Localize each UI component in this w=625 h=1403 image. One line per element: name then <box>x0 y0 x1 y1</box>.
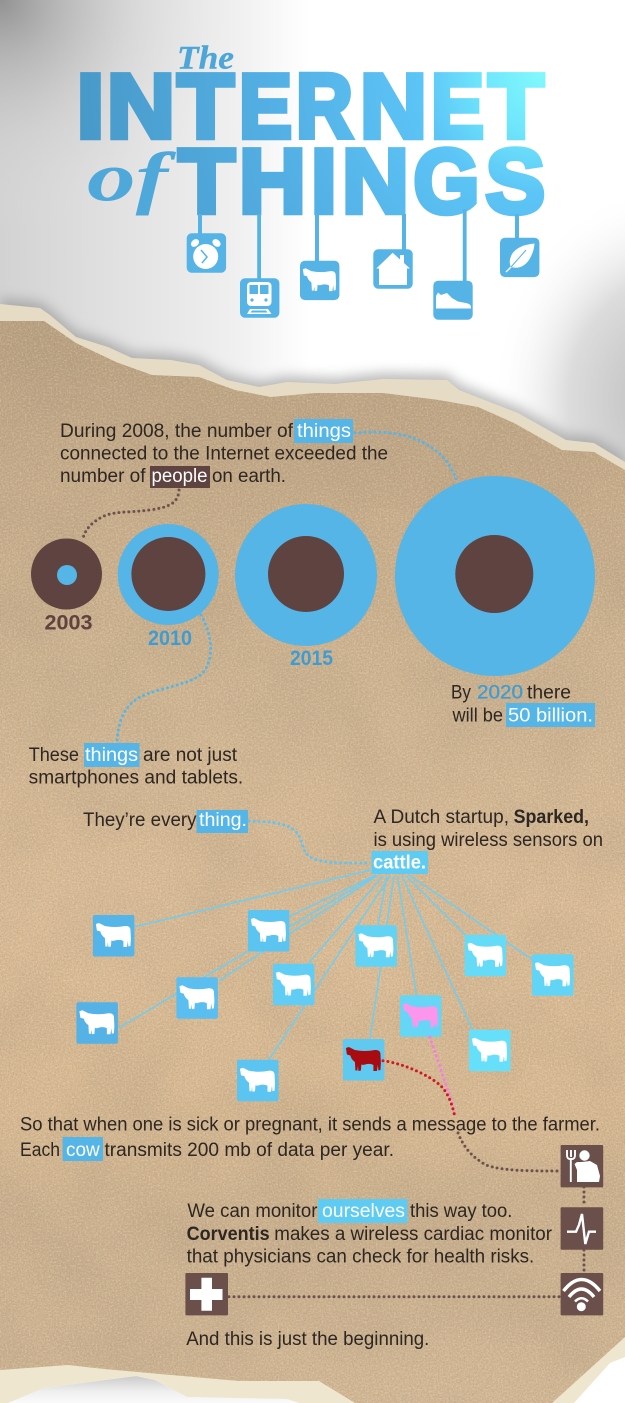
highlight: ourselves: ourselves <box>322 1201 405 1222</box>
title word: of: of <box>87 140 177 217</box>
text: sick or pregnant: So that when one is sick or pregnant, it sends a message to the farmer. <box>20 1114 600 1136</box>
connectors: brown icon chain <box>229 1187 584 1297</box>
circle 2003 <box>31 538 102 634</box>
highlight: cattle: cattle. <box>373 852 426 874</box>
connector: things to 2020 circle <box>355 432 457 482</box>
icon: farmer <box>561 1145 603 1187</box>
highlight: 50 billion: 50 billion. <box>508 706 593 726</box>
icon: cow <box>300 214 339 300</box>
title word: INTERNET: T <box>177 56 234 157</box>
title word: THINGS: G <box>413 131 479 232</box>
text: monitor ourselves: that physicians can check for health risks. <box>187 1246 534 1268</box>
text: closing line: And this is just the beginning. <box>186 1329 429 1350</box>
title word: INTERNET: R <box>296 56 353 157</box>
text: 2020 forecast: there <box>527 682 571 704</box>
title <box>76 40 545 232</box>
title word: The: The <box>177 40 234 76</box>
title word: INTERNET: T <box>488 56 544 157</box>
title word: THINGS: N <box>342 131 409 232</box>
text: not just smartphones: These <box>29 745 79 766</box>
title word: INTERNET: I <box>76 56 104 157</box>
cow 11: sick, red <box>343 1039 384 1080</box>
text: they're everything: They’re every <box>83 810 197 831</box>
cow 4 <box>465 935 506 976</box>
icon: alarm clock <box>187 214 226 273</box>
title word: INTERNET: E <box>239 56 292 157</box>
text: Sparked: Sparked, <box>514 807 589 828</box>
highlight: thing: thing. <box>199 810 247 831</box>
icon: running shoe <box>433 209 473 320</box>
cow 3 <box>355 925 397 967</box>
text: sick or pregnant: Each <box>20 1140 60 1161</box>
title word: THINGS: T <box>178 131 235 232</box>
text: Sparked: A Dutch startup, <box>374 807 509 828</box>
torn paper panel <box>0 298 625 1403</box>
connector: 2010 circle to things <box>117 615 211 742</box>
circle 2010: 2010 <box>148 627 192 650</box>
text: 2008 milestone <box>60 419 388 488</box>
text: not just smartphones <box>29 743 243 788</box>
connector: red cow alert <box>383 1061 454 1115</box>
text: monitor ourselves: We can monitor <box>187 1201 318 1222</box>
cow 8 <box>76 1002 118 1044</box>
title word: THINGS: I <box>311 131 337 232</box>
icon: heartbeat <box>561 1207 603 1250</box>
connector: people to 2003 circle <box>82 490 179 540</box>
title word: THINGS: H <box>239 131 306 232</box>
circle 2020 <box>395 476 595 676</box>
text: 2020 forecast: will be <box>452 706 503 726</box>
circle 2015: 2015 <box>290 647 333 670</box>
chart: things vs people circles <box>31 476 595 676</box>
title word: INTERNET: N <box>107 56 175 157</box>
sensor network lines <box>119 870 533 1060</box>
circle 2015 <box>235 504 377 670</box>
cow 2 <box>248 910 289 952</box>
text: 2008 milestone: on earth. <box>212 466 286 487</box>
icon: medical cross <box>185 1273 228 1315</box>
cow 12 <box>237 1060 278 1101</box>
highlight: things: things <box>85 745 138 766</box>
text: 2008 milestone: During 2008, the number of <box>60 421 294 442</box>
text: sick or pregnant <box>20 1114 600 1161</box>
cow 5 <box>532 954 574 996</box>
title word: INTERNET: N <box>360 56 427 157</box>
text: 2008 milestone: connected to the Internet exceeded the <box>60 444 388 464</box>
title word: INTERNET: E <box>431 56 484 157</box>
icon: train <box>240 214 279 318</box>
text: they're everything <box>83 810 248 833</box>
cow 6 <box>176 977 218 1019</box>
text: Sparked: is using wireless sensors on <box>374 830 603 851</box>
text: monitor ourselves: this way too. <box>410 1201 512 1222</box>
cow 1 <box>93 915 134 956</box>
text: not just smartphones: are not just <box>143 745 238 766</box>
hanging icons <box>187 209 539 320</box>
circle 2010 <box>118 524 219 650</box>
icon: house <box>373 214 413 289</box>
text: monitor ourselves: Corventis <box>187 1224 270 1245</box>
bottom torn backdrop <box>0 1340 625 1403</box>
connector: pink cow alert <box>430 1037 454 1115</box>
text: 2020 forecast: By <box>451 682 471 704</box>
highlight: cow: cow <box>66 1140 100 1161</box>
cow tiles <box>76 910 574 1101</box>
text: 2020 forecast: 2020 <box>477 682 523 704</box>
text: monitor ourselves <box>187 1199 553 1268</box>
highlight: people: people <box>152 466 208 487</box>
icon: wifi <box>561 1273 603 1315</box>
text: monitor ourselves: makes a wireless cardiac monitor <box>274 1224 553 1245</box>
cow 7 <box>273 964 314 1005</box>
text: not just smartphones: smartphones and tablets. <box>29 768 243 788</box>
cow 10 <box>469 1030 510 1071</box>
highlight: things: things <box>297 421 351 442</box>
connector: message to farmer <box>458 1133 560 1171</box>
text: 2008 milestone: number of <box>60 466 146 487</box>
connector: thing to cattle <box>249 821 371 863</box>
cow 9: pregnant, pink <box>400 995 442 1037</box>
text: Sparked <box>371 807 603 874</box>
title word: THINGS: S <box>486 131 545 232</box>
text: 2020 forecast <box>451 682 595 727</box>
text: sick or pregnant: transmits 200 mb of data per year. <box>104 1140 394 1161</box>
icon: leaf <box>500 214 539 277</box>
circle 2003: 2003 <box>44 612 92 634</box>
